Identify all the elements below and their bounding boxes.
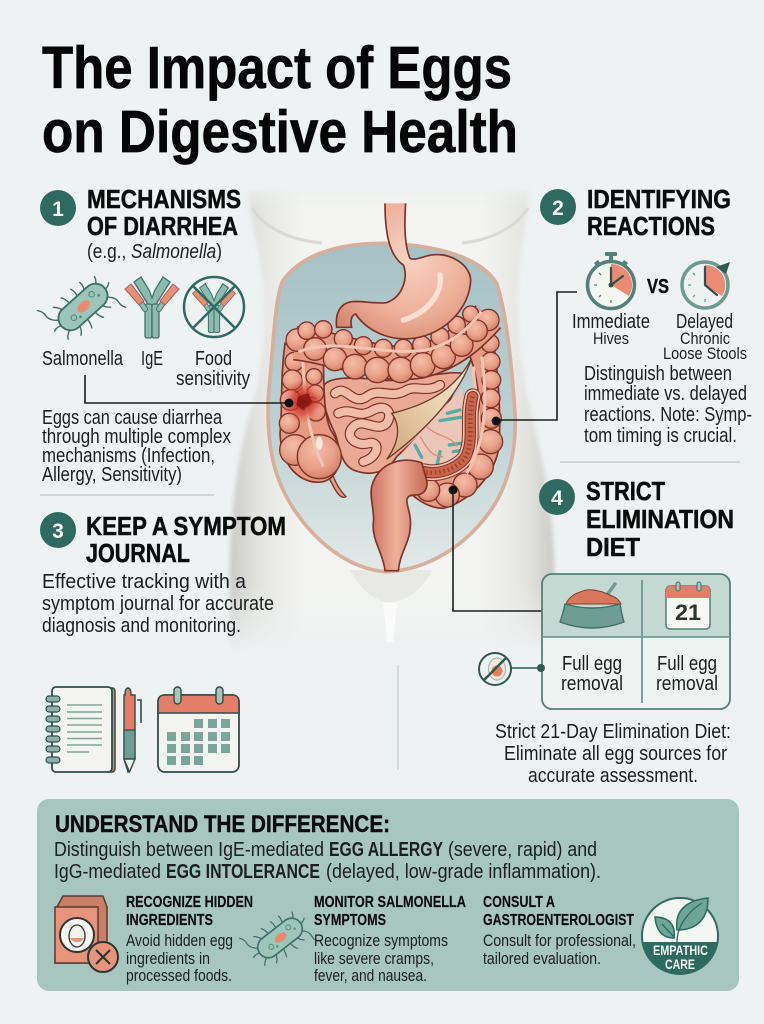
icon: pen: [124, 688, 141, 772]
callout line: reactions: [496, 292, 577, 420]
heading 3: KEEP A SYMPTOM: [86, 513, 286, 541]
number badge 1: [40, 190, 76, 226]
icon: IgE antibody: [125, 277, 179, 338]
callout dot: diet: [448, 486, 458, 494]
heading 1: (e.g., Salmonella): [87, 241, 222, 263]
mechanisms text: [42, 407, 231, 486]
heading 2: [587, 186, 731, 241]
callout line: diet: [453, 490, 542, 611]
tip: consult gastroenterologist: GASTROENTEROLOGIST: [483, 912, 634, 929]
icon: calendar: [158, 687, 239, 772]
journal text: Effective tracking with a: [42, 571, 247, 593]
number badge 4: 4: [551, 487, 563, 510]
panel: strict elimination diet: [479, 478, 734, 787]
tip: consult gastroenterologist: Consult for professional,: [483, 931, 636, 950]
icon: notebook: [46, 687, 115, 772]
diet text: Strict 21-Day Elimination Diet:: [495, 721, 731, 743]
table labels: removal: [561, 673, 623, 695]
table labels: [561, 653, 718, 695]
transverse colon: [286, 306, 499, 383]
abdominal anatomy illustration: [268, 203, 515, 572]
tip: consult gastroenterologist: [483, 894, 636, 968]
rectum: [371, 460, 427, 571]
peeled flap: [387, 358, 472, 459]
diet text: [495, 721, 731, 787]
icon labels: [42, 348, 250, 390]
table labels: Full egg: [657, 653, 717, 675]
panel heading: UNDERSTAND THE DIFFERENCE:: [55, 811, 390, 838]
mechanisms text: mechanisms (Infection,: [42, 445, 215, 467]
icon: immediate stopwatch: [588, 252, 634, 308]
mechanisms text: through multiple complex: [42, 426, 231, 448]
reaction labels: Immediate: [572, 311, 650, 333]
panel: identifying reactions: [540, 186, 752, 447]
heading 3: [86, 513, 286, 568]
tip: hidden ingredients: ingredients in: [126, 949, 210, 968]
callout dot: mechanisms: [284, 398, 294, 408]
versus label: VS: [647, 276, 669, 298]
diet text: accurate assessment.: [528, 765, 698, 787]
tip: hidden ingredients: INGREDIENTS: [126, 912, 213, 929]
difference explanation: (delayed, low-grade inflammation).: [326, 861, 601, 883]
tip: consult gastroenterologist: CONSULT A: [483, 894, 555, 911]
reaction labels: Delayed: [676, 311, 733, 333]
heading 4: ELIMINATION: [586, 506, 734, 534]
icon: calendar 21: 21: [675, 600, 701, 625]
stomach and esophagus: [336, 203, 471, 339]
tip: hidden ingredients: [126, 894, 253, 985]
icon labels: IgE: [141, 348, 163, 370]
icon: salmonella bacterium: [37, 263, 129, 353]
number badge 3: 3: [52, 520, 64, 543]
ascending colon and caecum: [279, 343, 346, 497]
number badge 4: [539, 479, 575, 515]
badge: empathic care: CARE: [665, 957, 695, 972]
descending colon: [403, 320, 503, 508]
reaction labels: [572, 311, 747, 363]
number badge 2: 2: [552, 197, 564, 220]
torso illustration: [222, 182, 562, 655]
icon labels: Food: [195, 348, 232, 370]
icon labels: Salmonella: [42, 348, 124, 370]
number badge 1: 1: [52, 198, 64, 221]
abdominal cavity: [268, 243, 515, 572]
table labels: removal: [656, 673, 718, 695]
reactions text: [584, 363, 752, 447]
panel: understand the difference: [37, 799, 739, 991]
badge: empathic care: [642, 898, 718, 974]
tip: hidden ingredients: processed foods.: [126, 966, 232, 985]
icon: processed food box: [55, 896, 118, 972]
journal text: diagnosis and monitoring.: [42, 615, 241, 637]
difference explanation: IgG-mediated: [54, 861, 161, 883]
inflamed site: [281, 380, 325, 424]
icon: delayed clock: [682, 262, 730, 308]
heading 4: DIET: [586, 534, 640, 562]
opened colon interior: [400, 367, 479, 478]
reaction labels: Loose Stools: [663, 344, 747, 363]
heading 3: JOURNAL: [86, 540, 190, 568]
tip: salmonella symptoms: Recognize symptoms: [314, 931, 448, 950]
journal text: [42, 571, 274, 637]
tip: salmonella symptoms: SYMPTOMS: [314, 912, 386, 929]
heading 1: MECHANISMS: [87, 186, 241, 214]
heading 1: OF DIARRHEA: [87, 213, 238, 241]
tip: salmonella symptoms: fever, and nausea.: [314, 966, 427, 985]
heading 1: [87, 186, 241, 263]
tip: salmonella symptoms: like severe cramps,: [314, 949, 434, 968]
difference explanation: Distinguish between IgE-mediated: [54, 839, 324, 861]
panel: mechanisms of diarrhea: [37, 186, 250, 486]
small intestine: [323, 373, 463, 473]
tip: hidden ingredients: RECOGNIZE HIDDEN: [126, 894, 253, 911]
number badge 3: [40, 512, 76, 548]
number badge 2: [540, 189, 576, 225]
title: The Impact of Eggs: [42, 35, 512, 101]
elimination table: [542, 574, 730, 709]
heading 4: STRICT: [586, 478, 665, 506]
heading 2: REACTIONS: [587, 213, 715, 241]
table labels: Full egg: [562, 653, 622, 675]
reactions text: Distinguish between: [584, 363, 732, 385]
mechanisms text: Eggs can cause diarrhea: [42, 407, 223, 429]
callout line: mechanisms: [85, 375, 289, 403]
difference explanation: [54, 839, 601, 883]
icon: no egg connector: [479, 653, 545, 685]
panel: symptom journal: [40, 512, 286, 772]
diet text: Eliminate all egg sources for: [504, 743, 727, 765]
reactions text: tom timing is crucial.: [584, 425, 737, 447]
mechanisms text: Allergy, Sensitivity): [42, 464, 182, 486]
heading 2: IDENTIFYING: [587, 186, 731, 214]
tip: consult gastroenterologist: tailored evaluation.: [483, 949, 601, 968]
tip: salmonella symptoms: [314, 894, 466, 985]
icon: bacterium small: [239, 899, 320, 978]
heading 4: [586, 478, 734, 562]
icon labels: sensitivity: [176, 368, 250, 390]
tip: hidden ingredients: Avoid hidden egg: [126, 931, 233, 950]
difference explanation: EGG INTOLERANCE: [166, 861, 320, 883]
reaction labels: Chronic: [680, 329, 730, 348]
badge: empathic care: EMPATHIC: [653, 943, 708, 958]
icon: food bowl: [560, 584, 624, 628]
reaction labels: Hives: [593, 329, 629, 348]
title: [42, 35, 518, 165]
icon: food sensitivity crossed antibody: [184, 277, 244, 337]
title: on Digestive Health: [42, 99, 518, 165]
icon: calendar 21: [666, 582, 710, 629]
tip: salmonella symptoms: MONITOR SALMONELLA: [314, 894, 466, 911]
journal text: symptom journal for accurate: [42, 593, 274, 615]
difference explanation: EGG ALLERGY: [329, 839, 444, 861]
difference explanation: (severe, rapid) and: [448, 839, 597, 861]
callout dot: reactions: [492, 416, 500, 426]
